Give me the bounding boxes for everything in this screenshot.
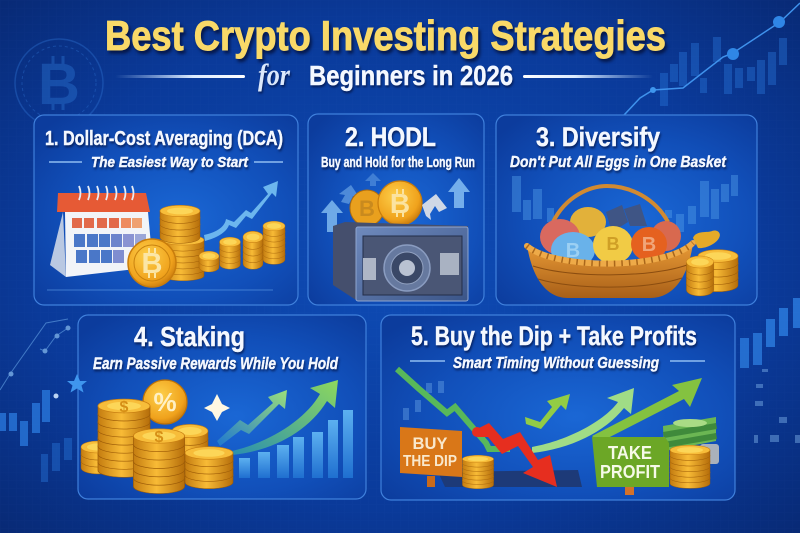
candles [512,175,738,232]
buy the dip sign [400,427,462,487]
panel: staking [78,315,366,499]
icon: bitcoin coin [128,239,176,287]
panel: diversify [496,115,757,305]
arrow: light green curve [532,388,634,453]
icon: coins [350,181,422,226]
panel 3 heading: 3. Diversify [536,122,660,152]
icon: percent coin [143,380,187,424]
candles [403,381,444,420]
icon: coin stacks [160,205,285,281]
arrow: blue rising [217,390,287,446]
subtitle: Beginners in 2026 [309,60,513,91]
arrow: green falling line [397,369,510,449]
coloured crypto eggs: B [642,234,656,256]
icon: coin stacks: $ [120,399,129,416]
panel 1 subheading: The Easiest Way to Start [91,154,249,171]
arrow: green rising [232,380,338,455]
coloured crypto eggs: B [566,240,580,262]
icon: coin stacks: $ [155,429,164,446]
icon: bitcoin coin: B [142,248,162,280]
panel: dollar-cost averaging [34,115,298,305]
panel 2 subheading: Buy and Hold for the Long Run [321,154,475,171]
take profit sign: TAKE [608,443,652,463]
icon: coins: B [359,196,375,221]
bitcoin watermark [15,39,103,127]
keyboard [438,470,582,487]
arrow: small green rising [525,394,570,429]
icon: sparkle [204,394,230,421]
bitcoin watermark: B [38,52,80,117]
take profit sign [592,437,669,495]
buy the dip sign: THE DIP [403,453,457,470]
panel 2 heading: 2. HODL [345,122,436,152]
icon: percent coin: % [153,387,177,417]
icon: blue star [67,374,87,392]
icon: cash stack [663,417,719,464]
baseline [47,289,273,291]
panel 1 heading: 1. Dollar-Cost Averaging (DCA) [45,128,283,150]
up arrows [321,173,470,232]
panel 5 heading: 5. Buy the Dip + Take Profits [411,321,697,351]
icon: coin stacks [81,399,233,494]
basket handle [553,186,668,222]
panel 4 heading: 4. Staking [134,321,245,352]
panel 5 subheading: Smart Timing Without Guessing [453,355,659,372]
icon: coins: B [390,188,410,219]
growth arrow [204,181,278,241]
coloured crypto eggs: B [606,234,620,254]
icon: calendar [50,186,153,277]
left market chart [0,319,72,482]
arrow: large green rising [592,378,702,442]
arrow: red falling [472,423,557,487]
icon: safe [333,222,468,301]
panel 4 subheading: Earn Passive Rewards While You Hold [93,354,338,373]
icon: woven basket [527,243,693,298]
subtitle [115,57,653,92]
top right market chart [610,3,800,130]
title: Best Crypto Investing Strategies [105,12,666,59]
coloured crypto eggs [540,204,681,268]
icon: coin stack [462,455,494,489]
icon: coin pile [686,230,738,296]
panel 3 subheading: Don't Put All Eggs in One Basket [510,154,727,171]
take profit sign: PROFIT [600,462,660,482]
subtitle: for [258,57,291,92]
icon: coin stack right [670,445,710,488]
bar chart [239,410,353,478]
panel: buy the dip and take profits [381,315,735,500]
icon: bracket [422,194,447,220]
right market chart [740,298,800,443]
buy the dip sign: BUY [412,434,448,453]
panel: hodl [308,114,484,305]
